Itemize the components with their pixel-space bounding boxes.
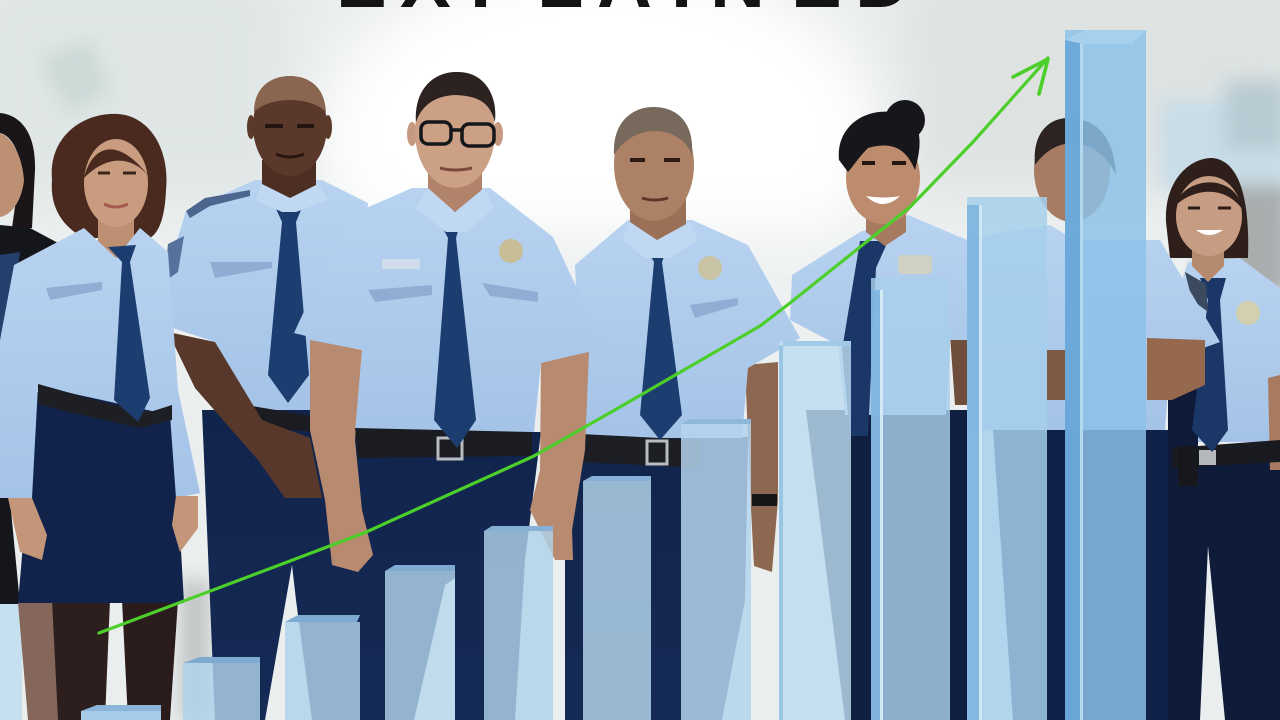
badge <box>1236 301 1260 325</box>
arms crossed <box>1147 338 1205 400</box>
face <box>84 139 150 227</box>
pants <box>565 437 748 720</box>
neck <box>630 195 686 240</box>
bar 10 <box>967 197 1047 720</box>
pocket <box>46 282 102 300</box>
person: woman with bun <box>790 100 967 720</box>
belt <box>355 428 532 458</box>
tie <box>842 241 888 436</box>
hands <box>8 496 198 560</box>
bar 8 <box>779 341 851 720</box>
hair <box>1166 158 1248 258</box>
patch <box>1185 272 1208 312</box>
pocket <box>690 298 738 318</box>
bar 2 <box>183 657 260 720</box>
belt <box>580 434 700 468</box>
bar: partial pale bar at left edge <box>0 604 22 720</box>
pocket <box>210 262 272 278</box>
arm and hands <box>168 332 322 498</box>
hand <box>1047 350 1065 400</box>
bar 9 <box>871 278 950 720</box>
belt and holster <box>1172 440 1280 486</box>
face <box>1176 176 1243 256</box>
pants <box>345 432 541 720</box>
shirt <box>294 188 605 432</box>
bar 3 <box>285 615 360 720</box>
bar 5 <box>484 526 553 720</box>
arm <box>1268 375 1280 470</box>
neck <box>866 210 906 246</box>
arrow: growth trend <box>99 58 1048 633</box>
person: centre man with glasses <box>294 72 605 720</box>
shirt and sleeves <box>0 228 200 498</box>
bar 11 <box>1065 30 1146 720</box>
tie <box>434 210 476 448</box>
person: far left woman <box>0 113 64 720</box>
collar <box>622 222 698 258</box>
neck <box>98 215 134 260</box>
epaulette <box>186 190 250 218</box>
shirt <box>575 220 800 438</box>
collar <box>416 188 494 232</box>
shirt <box>152 180 368 410</box>
person: bald man <box>152 76 368 720</box>
shirt <box>1170 258 1280 442</box>
bar 6 <box>583 476 651 720</box>
arm <box>745 362 778 572</box>
neck <box>1192 245 1224 282</box>
head <box>407 72 503 188</box>
person: right woman's pants behind bars <box>993 430 1178 720</box>
jacket shadow <box>1168 345 1198 480</box>
watch <box>752 494 777 506</box>
bar 7 <box>681 419 751 720</box>
head <box>1034 118 1116 222</box>
hair <box>52 114 167 238</box>
tie <box>640 236 682 440</box>
tie <box>108 245 150 422</box>
head <box>247 76 332 176</box>
person: grey haired man <box>565 107 800 720</box>
belt <box>38 384 172 428</box>
person: far right woman <box>1166 158 1280 720</box>
badge <box>898 255 932 274</box>
arms <box>310 340 589 572</box>
tie <box>1192 278 1228 452</box>
pants <box>202 410 356 720</box>
pants <box>1168 462 1280 720</box>
person: woman behind tall bars <box>970 118 1220 430</box>
badge <box>698 256 722 280</box>
shirt <box>970 225 1220 430</box>
pockets <box>368 283 538 302</box>
skirt <box>18 392 184 603</box>
head <box>614 107 694 221</box>
head <box>839 100 925 224</box>
bar 1 <box>81 705 161 720</box>
shirt <box>790 215 967 415</box>
collar <box>256 184 328 212</box>
legs <box>52 600 178 720</box>
arm <box>950 335 967 405</box>
person: brown haired woman <box>0 114 200 720</box>
pants <box>806 410 967 720</box>
name plate <box>382 259 420 269</box>
neck <box>428 160 482 212</box>
badge <box>499 239 523 263</box>
tie <box>268 198 309 403</box>
neck <box>262 160 316 198</box>
patch <box>164 236 184 282</box>
bar 4 <box>385 565 455 720</box>
bar chart <box>81 30 1146 720</box>
belt <box>240 404 312 432</box>
